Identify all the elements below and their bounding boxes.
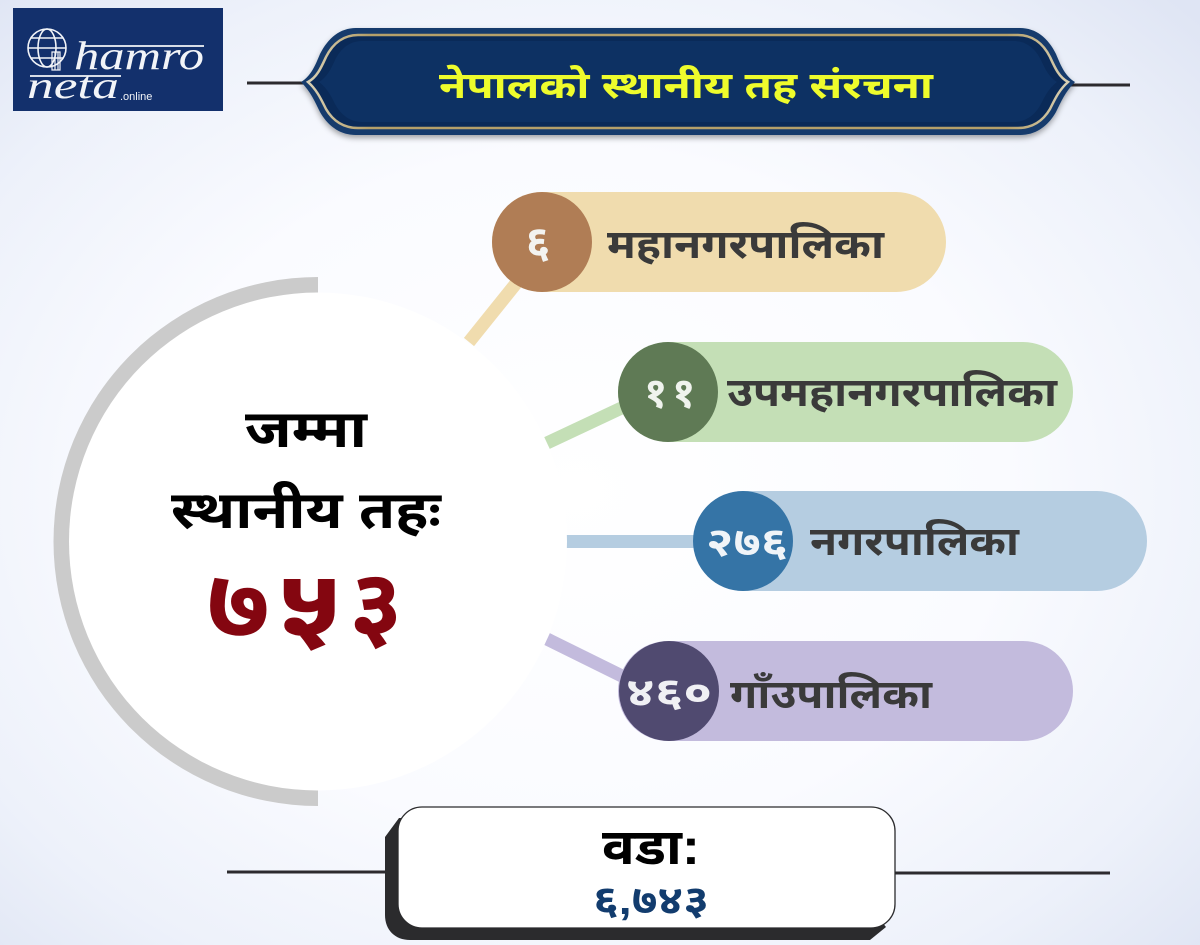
count circle [693, 491, 793, 591]
icon: globe [28, 29, 66, 70]
count: २७६ [706, 521, 788, 565]
title text: नेपालको स्थानीय तह संरचना [439, 64, 934, 106]
connector: metropolitan [469, 276, 522, 342]
pill: rural municipality [618, 641, 1073, 741]
ward number: ६,७४३ [593, 879, 709, 923]
title banner [247, 28, 1130, 135]
total number: ५ [276, 552, 343, 659]
count circle [619, 641, 719, 741]
connector: rural municipality [547, 639, 630, 680]
total label line 1: जम्मा [245, 401, 369, 459]
logo wordmark: neta: neta [27, 65, 119, 107]
connector: municipality [566, 535, 701, 548]
total number [206, 552, 403, 659]
logo wordmark: .online: .online [120, 91, 152, 103]
count: ११ [644, 369, 696, 416]
label: महानगरपालिका [607, 222, 885, 267]
count circle [492, 192, 592, 292]
pill: municipality [693, 491, 1147, 591]
connector: sub-metropolitan [547, 404, 630, 443]
total number: ३ [349, 552, 403, 659]
label: नगरपालिका [810, 519, 1020, 564]
box shadow [385, 818, 886, 940]
white circle [69, 292, 567, 790]
pill: sub-metropolitan [618, 342, 1073, 442]
box [398, 807, 895, 928]
count: ६ [526, 218, 550, 267]
grey arc [54, 277, 318, 806]
count circle [618, 342, 718, 442]
total label line 2: स्थानीय तहः [171, 482, 443, 540]
pill: metropolitan [492, 192, 946, 292]
logo wordmark: hamro: hamro [74, 33, 204, 78]
logo [13, 8, 223, 111]
count: ४६० [626, 671, 712, 715]
total panel [54, 277, 567, 806]
ward label: वडा: [602, 819, 700, 875]
ward panel [227, 807, 1110, 940]
label: गाँउपालिका [730, 672, 933, 717]
label: उपमहानगरपालिका [727, 370, 1058, 415]
total number: ७ [206, 552, 270, 659]
